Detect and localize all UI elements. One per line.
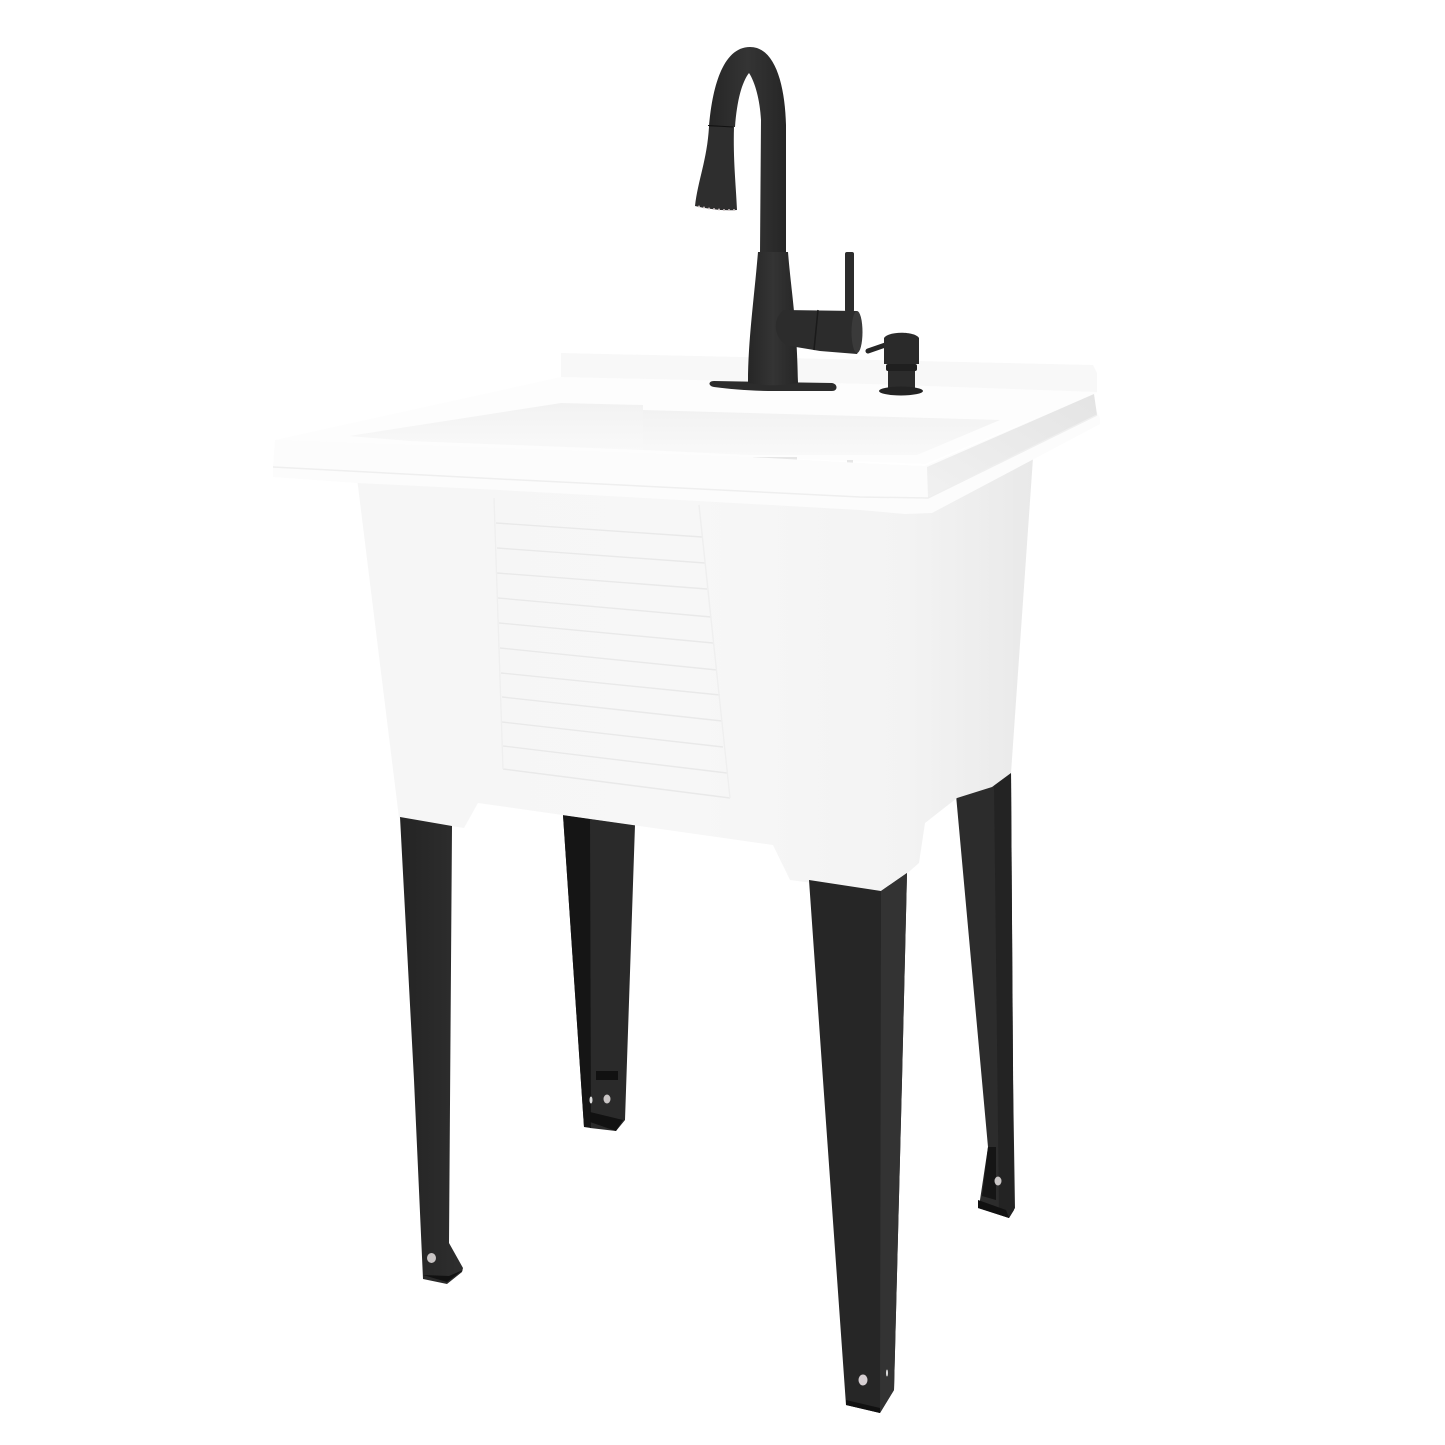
- tub body: [357, 458, 1033, 892]
- faucet base: [748, 252, 798, 385]
- rim right side shaded face: [927, 394, 1097, 498]
- rim top surface: [275, 377, 1097, 464]
- front-right leg: [809, 873, 907, 1413]
- soap dispenser: [868, 333, 923, 396]
- front-left leg: [400, 817, 463, 1284]
- rim front face: [273, 394, 1100, 514]
- back-middle leg: [563, 815, 635, 1131]
- deck plate: [710, 381, 836, 391]
- back-right leg: [956, 770, 1015, 1218]
- sink rim and basin: [273, 353, 1100, 514]
- rim front lip line: [273, 415, 1097, 498]
- basin right section: [643, 410, 1000, 455]
- spray nozzle dots: [698, 206, 735, 211]
- handle lever: [845, 252, 854, 312]
- pull-down spray head: [695, 127, 737, 210]
- basin left section: [349, 403, 643, 450]
- faucet: [695, 47, 923, 396]
- mixer handle: [776, 310, 862, 354]
- washboard louvre panel: [494, 498, 730, 798]
- basin front notch marks: [753, 457, 853, 464]
- back splash: [561, 353, 1097, 392]
- gooseneck spout: [709, 47, 786, 252]
